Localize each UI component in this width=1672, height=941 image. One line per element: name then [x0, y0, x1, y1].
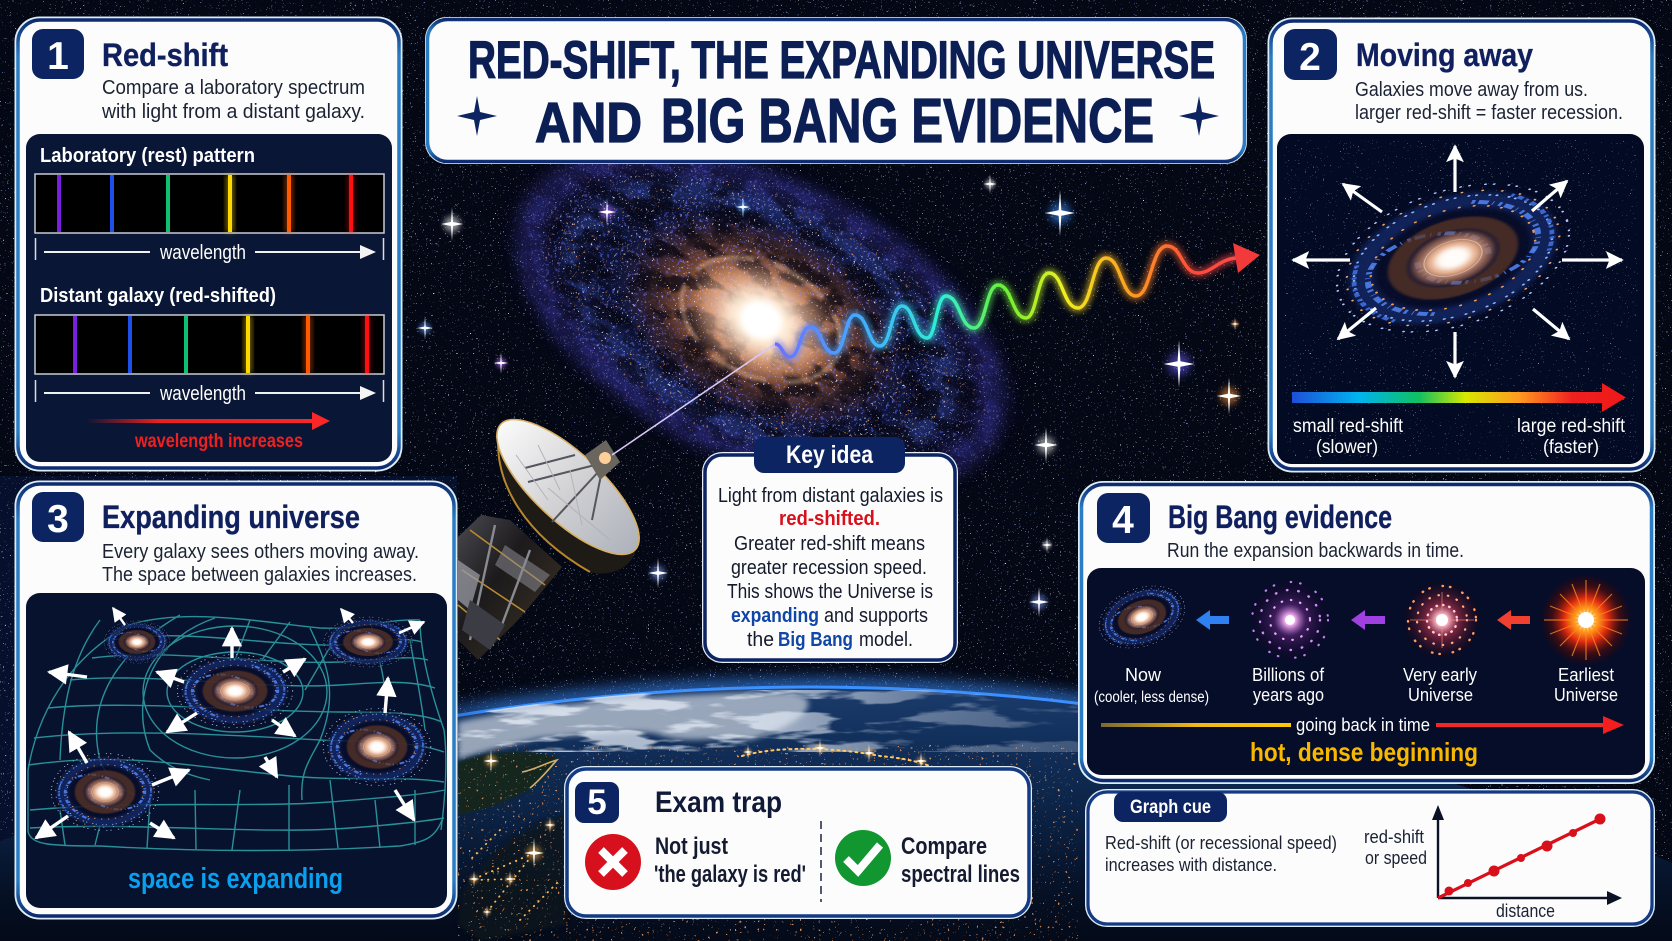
key idea tab: [754, 437, 905, 473]
laboratory spectrum: [35, 174, 384, 233]
wavelength axis: [36, 238, 384, 264]
stage labels: years ago: [1253, 685, 1324, 705]
stage labels: Very early: [1403, 665, 1477, 685]
key idea text: Big Bang: [778, 629, 853, 651]
wavelength axis 2: [36, 380, 384, 405]
large red-shift label: [1517, 416, 1626, 458]
city lights: [468, 739, 935, 920]
description: with light from a distant galaxy.: [101, 100, 365, 123]
arrow purple: [1351, 610, 1385, 630]
earth: [0, 687, 1672, 941]
correct text: spectral lines: [901, 861, 1020, 888]
galaxies: [49, 616, 433, 832]
spiral galaxy: [500, 164, 1022, 490]
expansion arrows: [36, 608, 424, 838]
satellite: [458, 344, 775, 660]
red arrow: [86, 412, 330, 430]
stage labels: Earliest: [1558, 665, 1614, 685]
stage labels: Universe: [1554, 685, 1618, 705]
small red-shift label: (slower): [1316, 437, 1378, 458]
panel 3: expanding universe: [14, 480, 458, 920]
key idea text: This shows the Universe is: [727, 581, 933, 603]
heading: Expanding universe: [102, 499, 360, 535]
large red-shift label: large red-shift: [1517, 416, 1626, 437]
satellite body: [458, 515, 562, 660]
space is expanding label: space is expanding: [128, 863, 343, 895]
wrong text: [654, 833, 806, 888]
key idea text: greater recession speed.: [731, 557, 927, 579]
heading: Moving away: [1356, 37, 1533, 73]
wavelength axis 2: wavelength: [159, 383, 246, 405]
heading: Red-shift: [102, 37, 228, 73]
title line 2: BIG BANG EVIDENCE: [661, 87, 1154, 156]
y axis label: or speed: [1365, 848, 1427, 868]
stage labels: Billions of: [1252, 665, 1325, 685]
spectra panel: [26, 134, 392, 462]
badge 2: [1284, 29, 1337, 80]
badge 5: 5: [587, 783, 607, 822]
left sparkle: [457, 96, 497, 136]
graph cue tab: [1114, 792, 1227, 822]
panel 1: red-shift: [14, 16, 402, 472]
description: Compare a laboratory spectrum: [102, 76, 365, 99]
key idea text: and supports: [824, 605, 928, 627]
graph cue text: increases with distance.: [1105, 854, 1277, 875]
key idea text: red-shifted.: [779, 508, 880, 530]
recession arrows: [1293, 146, 1622, 377]
satellite dish back: [498, 426, 636, 574]
heading: Exam trap: [655, 786, 782, 819]
background bright stars: [417, 174, 1241, 617]
now galaxy: [1089, 573, 1195, 661]
panel 2: moving away: [1268, 18, 1656, 472]
timeline panel: [1087, 568, 1645, 775]
badge 3: [32, 492, 84, 542]
y axis label: [1364, 827, 1427, 868]
key idea text: model.: [859, 629, 913, 651]
heading: Big Bang evidence: [1168, 499, 1392, 535]
title banner: [425, 17, 1247, 164]
axes: [1432, 805, 1622, 905]
badge 5: [575, 782, 619, 823]
key idea text: Greater red-shift means: [734, 533, 925, 555]
badge 3: 3: [47, 498, 69, 541]
wrong text: Not just: [655, 833, 728, 860]
right sparkle: [1179, 96, 1219, 136]
x axis label: distance: [1496, 901, 1555, 921]
stage labels: [1094, 665, 1618, 706]
light wave turning from blue to red: [775, 243, 1260, 357]
laboratory label: Laboratory (rest) pattern: [40, 144, 255, 167]
wavelength increases label: wavelength increases: [134, 430, 303, 452]
graph cue panel: [1085, 789, 1655, 927]
wavelength axis: wavelength: [159, 242, 246, 264]
galaxy: [1312, 153, 1594, 363]
key idea callout: [702, 437, 958, 663]
panel 4: big bang evidence: [1078, 481, 1655, 784]
wrong icon: [585, 834, 641, 890]
panel 5: exam trap: [564, 766, 1032, 919]
correct text: Compare: [901, 833, 987, 860]
description: Every galaxy sees others moving away.: [102, 540, 419, 563]
graph cue text: [1105, 832, 1337, 875]
correct icon: [835, 830, 891, 886]
key idea tab: Key idea: [786, 441, 874, 469]
stage labels: Now: [1125, 665, 1162, 685]
clouds: [458, 690, 1078, 760]
satellite feed and struts: [516, 440, 620, 540]
light beam: [612, 344, 775, 455]
distant spectrum: [35, 315, 384, 374]
correct text: [901, 833, 1020, 888]
line graph: [1364, 805, 1622, 921]
badge 4: [1097, 493, 1150, 543]
badge 1: 1: [47, 35, 69, 78]
distant galaxy label: Distant galaxy (red-shifted): [40, 284, 276, 307]
badge 4: 4: [1112, 499, 1134, 542]
key idea text: Light from distant galaxies is: [718, 485, 943, 507]
hot dense beginning: hot, dense beginning: [1250, 737, 1478, 767]
description: larger red-shift = faster recession.: [1355, 101, 1623, 124]
description: [101, 76, 365, 123]
graph cue tab: Graph cue: [1130, 796, 1211, 818]
y axis label: red-shift: [1364, 827, 1424, 847]
space grid: [28, 615, 446, 851]
going back in time arrow: going back in time: [1296, 715, 1430, 735]
small red-shift label: small red-shift: [1293, 416, 1404, 437]
graph cue text: Red-shift (or recessional speed): [1105, 832, 1337, 853]
stage labels: Universe: [1408, 685, 1473, 705]
small red-shift label: [1293, 416, 1404, 458]
arrow red: [1497, 610, 1530, 630]
badge 1: [32, 29, 84, 79]
key idea text: expanding: [731, 605, 819, 627]
very early universe icon: [1402, 580, 1482, 660]
title line 2: [535, 87, 1154, 156]
large red-shift label: (faster): [1543, 437, 1599, 458]
land and coast: [458, 745, 1078, 941]
earliest universe icon: [1540, 574, 1632, 666]
rainbow scale arrow: [1292, 383, 1626, 412]
description: The space between galaxies increases.: [102, 563, 417, 586]
going back in time arrow: [1101, 715, 1624, 735]
arrow blue: [1196, 610, 1229, 630]
billions of years icon: [1248, 578, 1332, 662]
expanding space illustration: [26, 593, 447, 908]
key idea text: the: [747, 629, 774, 651]
data line and points: [1438, 814, 1606, 898]
wrong text: 'the galaxy is red': [654, 861, 806, 888]
description: Run the expansion backwards in time.: [1167, 539, 1464, 562]
description: Galaxies move away from us.: [1355, 78, 1588, 101]
title line 2: AND: [535, 91, 642, 155]
description: [1355, 78, 1623, 124]
badge 2: 2: [1299, 36, 1321, 79]
stage labels: (cooler, less dense): [1094, 689, 1209, 706]
satellite dish: [478, 399, 658, 575]
description: [102, 540, 419, 586]
title line 1: RED-SHIFT, THE EXPANDING UNIVERSE: [468, 31, 1215, 90]
key idea text: [718, 485, 943, 651]
galaxy illustration panel: [1277, 134, 1644, 464]
